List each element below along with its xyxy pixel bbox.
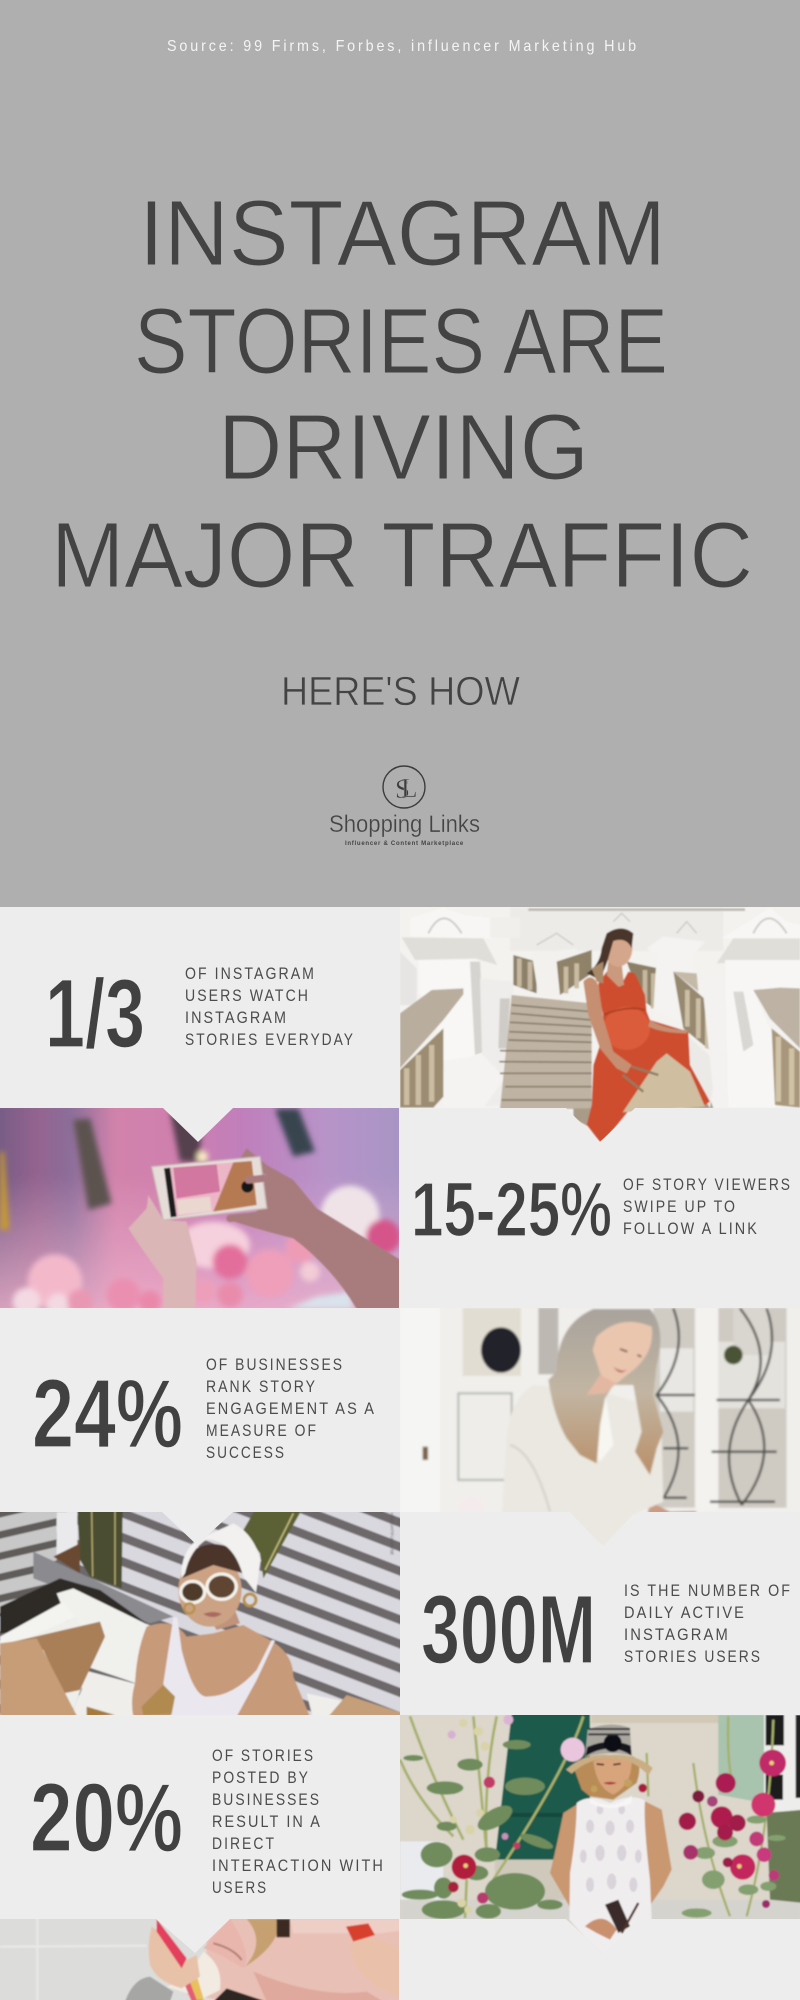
- right arm and hand: [228, 1148, 403, 1312]
- panels background: [0, 907, 800, 2000]
- stat text: RANK STORY: [206, 1378, 317, 1396]
- stat text: DAILY ACTIVE: [624, 1604, 746, 1622]
- source line: Source: 99 Firms, Forbes, influencer Marketing Hub: [167, 38, 639, 55]
- stat panel: 20%: [30, 1747, 385, 1897]
- stat text: POSTED BY: [212, 1769, 310, 1787]
- photo: blonde woman in white sweater: [422, 1308, 788, 1545]
- photo: woman in white sunglasses and towel with pizza: [0, 1512, 400, 1715]
- stat text: DIRECT: [212, 1835, 276, 1853]
- left hollyhock plants: [400, 1715, 585, 1919]
- stat text: STORIES USERS: [624, 1648, 762, 1666]
- stat number: 24%: [32, 1359, 183, 1468]
- subtitle: HERE'S HOW: [281, 668, 520, 714]
- photo: woman in white dress and hat among hollyhocks: [400, 1715, 800, 1940]
- photo: woman in pink sweater with straw and toy: [0, 1919, 399, 2000]
- logo tagline: Influencer & Content Marketplace: [345, 841, 464, 847]
- logo monogram: S: [395, 774, 410, 804]
- stat text: RESULT IN A: [212, 1813, 322, 1831]
- stat text: SUCCESS: [206, 1444, 286, 1462]
- stat text: USERS WATCH: [185, 987, 310, 1005]
- stat panel: 24%: [32, 1356, 376, 1468]
- phone: [152, 1157, 267, 1220]
- logo monogram: [383, 766, 425, 808]
- title: INSTAGRAM: [139, 181, 666, 285]
- title: STORIES ARE: [134, 289, 668, 393]
- stat text: INSTAGRAM: [624, 1626, 730, 1644]
- stat text: [624, 1582, 792, 1666]
- stat panel: 15-25%: [411, 1167, 792, 1253]
- stat text: BUSINESSES: [212, 1791, 321, 1809]
- left hand: [128, 1195, 197, 1312]
- photo: hands holding phone, pink balloons: [0, 1108, 399, 1308]
- stat text: [185, 965, 355, 1049]
- stat text: [623, 1176, 792, 1238]
- logo wordmark: Shopping Links: [329, 811, 480, 838]
- stat text: INTERACTION WITH: [212, 1857, 385, 1875]
- stat panel: 300M: [421, 1575, 792, 1684]
- header panel background: [0, 0, 800, 907]
- right hollyhock plants: [638, 1716, 786, 1918]
- face: [593, 1322, 652, 1383]
- stat number: 300M: [421, 1575, 596, 1684]
- stat number: 15-25%: [411, 1167, 612, 1253]
- stat text: [212, 1747, 385, 1897]
- stat text: OF INSTAGRAM: [185, 965, 316, 983]
- stat panel: 1/3: [45, 959, 355, 1068]
- hair: [548, 1309, 663, 1475]
- woman: [132, 1523, 310, 1717]
- woman: [583, 928, 710, 1142]
- stat text: FOLLOW A LINK: [623, 1220, 759, 1238]
- title: [51, 181, 753, 607]
- woman: [550, 1725, 672, 1955]
- stat text: ENGAGEMENT AS A: [206, 1400, 376, 1418]
- photo: woman in red dress on white stairs: [400, 908, 800, 1142]
- pizza boxes: [0, 1622, 403, 1717]
- stat text: OF STORIES: [212, 1747, 315, 1765]
- watermark: HOUGHTFULMUSE: [390, 1513, 395, 1555]
- logo monogram: L: [401, 773, 418, 803]
- title: MAJOR TRAFFIC: [51, 503, 753, 607]
- stat text: INSTAGRAM: [185, 1009, 288, 1027]
- logo: Shopping Links: [329, 766, 480, 847]
- stat text: STORIES EVERYDAY: [185, 1031, 355, 1049]
- stat text: USERS: [212, 1879, 268, 1897]
- stat text: SWIPE UP TO: [623, 1198, 737, 1216]
- stat text: OF BUSINESSES: [206, 1356, 344, 1374]
- stat text: MEASURE OF: [206, 1422, 318, 1440]
- stat text: [206, 1356, 376, 1462]
- stat number: 1/3: [45, 959, 145, 1068]
- stat number: 20%: [30, 1763, 183, 1872]
- sweater: [502, 1385, 663, 1547]
- title: DRIVING: [218, 395, 589, 499]
